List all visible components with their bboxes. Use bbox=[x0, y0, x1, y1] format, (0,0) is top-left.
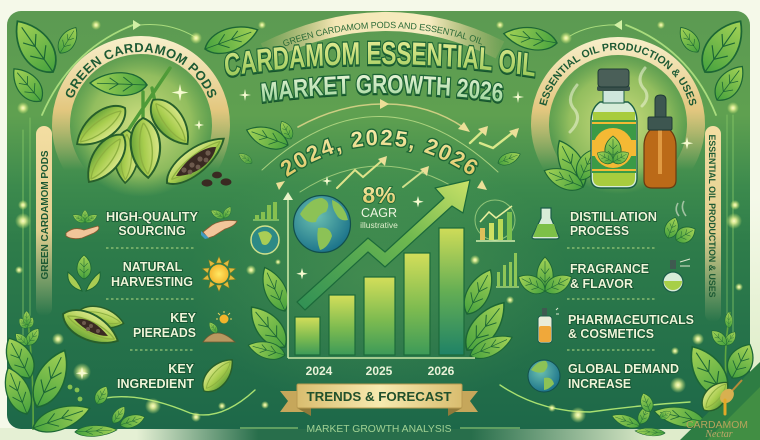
ring heading: ESSENTIAL OIL PRODUCTION & USES bbox=[539, 42, 696, 106]
watermark logo bbox=[686, 376, 748, 440]
bottom left foliage bbox=[0, 311, 147, 438]
top left leaves bbox=[5, 13, 262, 108]
item: high-quality sourcing: SOURCING bbox=[118, 224, 186, 238]
icon: three leaves bbox=[515, 257, 575, 298]
arrowheads bbox=[133, 20, 622, 190]
divider bbox=[567, 298, 655, 300]
item: high-quality sourcing bbox=[66, 205, 237, 239]
axes bbox=[288, 196, 475, 358]
title band: GREEN CARDAMOM PODS AND ESSENTIAL OIL bbox=[283, 22, 482, 46]
herb leaves bbox=[541, 136, 603, 195]
icon: globe bbox=[528, 360, 560, 392]
top right leaves bbox=[502, 13, 753, 106]
footer label: MARKET GROWTH ANALYSIS bbox=[306, 424, 452, 435]
icon: cardamom pod bbox=[196, 353, 240, 398]
divider bbox=[567, 349, 655, 351]
item: natural harvesting: HARVESTING bbox=[111, 275, 193, 289]
item: global demand: GLOBAL DEMAND bbox=[568, 362, 679, 376]
watermark logo: CARDAMOM bbox=[686, 420, 748, 431]
CAGR callout: 8% bbox=[362, 182, 396, 208]
vertical label: green cardamom pods: GREEN CARDAMOM PODS bbox=[40, 150, 51, 280]
axis arrow bbox=[283, 192, 293, 200]
CAGR callout: CAGR bbox=[361, 206, 397, 220]
panel: green cardamom pods bbox=[52, 36, 232, 194]
item: global demand bbox=[528, 360, 679, 392]
ribbon: trends and forecast: TRENDS & FORECAST bbox=[306, 390, 452, 404]
title band bbox=[261, 12, 504, 60]
year labels: 2024 bbox=[306, 364, 333, 378]
icon: leaf in hands bbox=[68, 255, 100, 291]
gold ring bbox=[540, 46, 696, 202]
ribbon: trends and forecast bbox=[280, 384, 478, 416]
watermark logo: Nectar bbox=[704, 429, 733, 440]
CAGR callout bbox=[360, 182, 398, 230]
icon: flask bbox=[532, 208, 559, 239]
item: key piereads: KEY bbox=[170, 311, 197, 325]
item: high-quality sourcing: HIGH-QUALITY bbox=[106, 210, 199, 224]
right bar mini chart bbox=[496, 253, 519, 287]
amber dropper bottle bbox=[644, 95, 676, 188]
steam bbox=[570, 68, 647, 132]
vertical label: green cardamom pods bbox=[36, 126, 52, 316]
icon: round flask bbox=[663, 259, 690, 292]
item: fragrance and flavor: & FLAVOR bbox=[570, 277, 633, 291]
right margin bbox=[745, 0, 760, 440]
divider bbox=[567, 247, 655, 249]
item: distillation: PROCESS bbox=[570, 224, 629, 238]
item: pharmaceuticals and cosmetics: PHARMACEUTICALS bbox=[568, 313, 694, 327]
bar 2025 bbox=[364, 277, 395, 355]
year labels bbox=[306, 364, 455, 378]
ring heading: GREEN CARDAMOM PODS bbox=[66, 43, 216, 98]
item: natural harvesting: NATURAL bbox=[123, 260, 183, 274]
item: natural harvesting bbox=[68, 255, 237, 292]
CAGR callout: illustrative bbox=[360, 220, 398, 230]
vertical label: essential oil production bbox=[705, 126, 721, 322]
vertical label: essential oil production: ESSENTIAL OIL PRODUCTION & USES bbox=[707, 134, 717, 298]
leaves near arc bbox=[237, 119, 522, 168]
divider bbox=[130, 349, 195, 351]
cardamom branch with pods bbox=[69, 68, 198, 190]
panel: essential oil production bbox=[531, 37, 705, 192]
bottom right foliage bbox=[610, 312, 760, 437]
years arc heading: 2024, 2025, 2026 bbox=[280, 128, 479, 178]
bar 2026 bbox=[439, 228, 464, 355]
watermark corner bbox=[680, 362, 760, 440]
item: global demand: INCREASE bbox=[568, 377, 631, 391]
title bbox=[224, 40, 536, 104]
item: distillation bbox=[532, 201, 699, 247]
item: pharmaceuticals and cosmetics bbox=[538, 308, 694, 343]
item: key ingredient: INGREDIENT bbox=[117, 377, 194, 391]
year labels: 2025 bbox=[366, 364, 393, 378]
icon: hand with seedling bbox=[201, 205, 237, 239]
icon: pod and honey dipper bbox=[696, 376, 742, 417]
divider bbox=[106, 298, 195, 300]
icon: hand with sprout bbox=[66, 210, 99, 239]
right circular mini chart bbox=[475, 200, 515, 241]
title: MARKET GROWTH 2026 bbox=[260, 74, 504, 104]
icon: sun bbox=[201, 256, 237, 292]
gold ring bbox=[61, 45, 221, 205]
bar 2024 bbox=[295, 317, 320, 355]
bar 2024b bbox=[329, 295, 355, 355]
bottom strip bbox=[0, 428, 760, 440]
year labels: 2026 bbox=[428, 364, 455, 378]
divider bbox=[106, 247, 195, 249]
leaves beside chart bbox=[242, 263, 516, 364]
item: key ingredient bbox=[117, 353, 240, 398]
item: key piereads: PIEREADS bbox=[133, 326, 196, 340]
icon: small bottle bbox=[538, 308, 559, 343]
icon: leaves with steam bbox=[662, 201, 699, 247]
left mini chart bbox=[251, 202, 279, 254]
icon: open pods bbox=[57, 302, 126, 352]
item: fragrance and flavor bbox=[515, 257, 690, 298]
item: pharmaceuticals and cosmetics: & COSMETICS bbox=[568, 327, 654, 341]
globe bbox=[294, 196, 350, 252]
item: key piereads bbox=[57, 302, 235, 352]
icon: sprout with soil and sun bbox=[203, 311, 235, 342]
item: distillation: DISTILLATION bbox=[570, 210, 657, 224]
trend arrow bbox=[297, 180, 470, 310]
title: CARDAMOM ESSENTIAL OIL bbox=[224, 40, 536, 79]
item: fragrance and flavor: FRAGRANCE bbox=[570, 262, 649, 276]
bar chart bbox=[283, 180, 475, 378]
large oil bottle bbox=[591, 69, 637, 188]
bar 2025b bbox=[404, 253, 430, 355]
left list bbox=[57, 205, 240, 398]
item: key ingredient: KEY bbox=[168, 362, 195, 376]
right list bbox=[515, 201, 699, 392]
open cardamom pod bbox=[160, 129, 232, 193]
